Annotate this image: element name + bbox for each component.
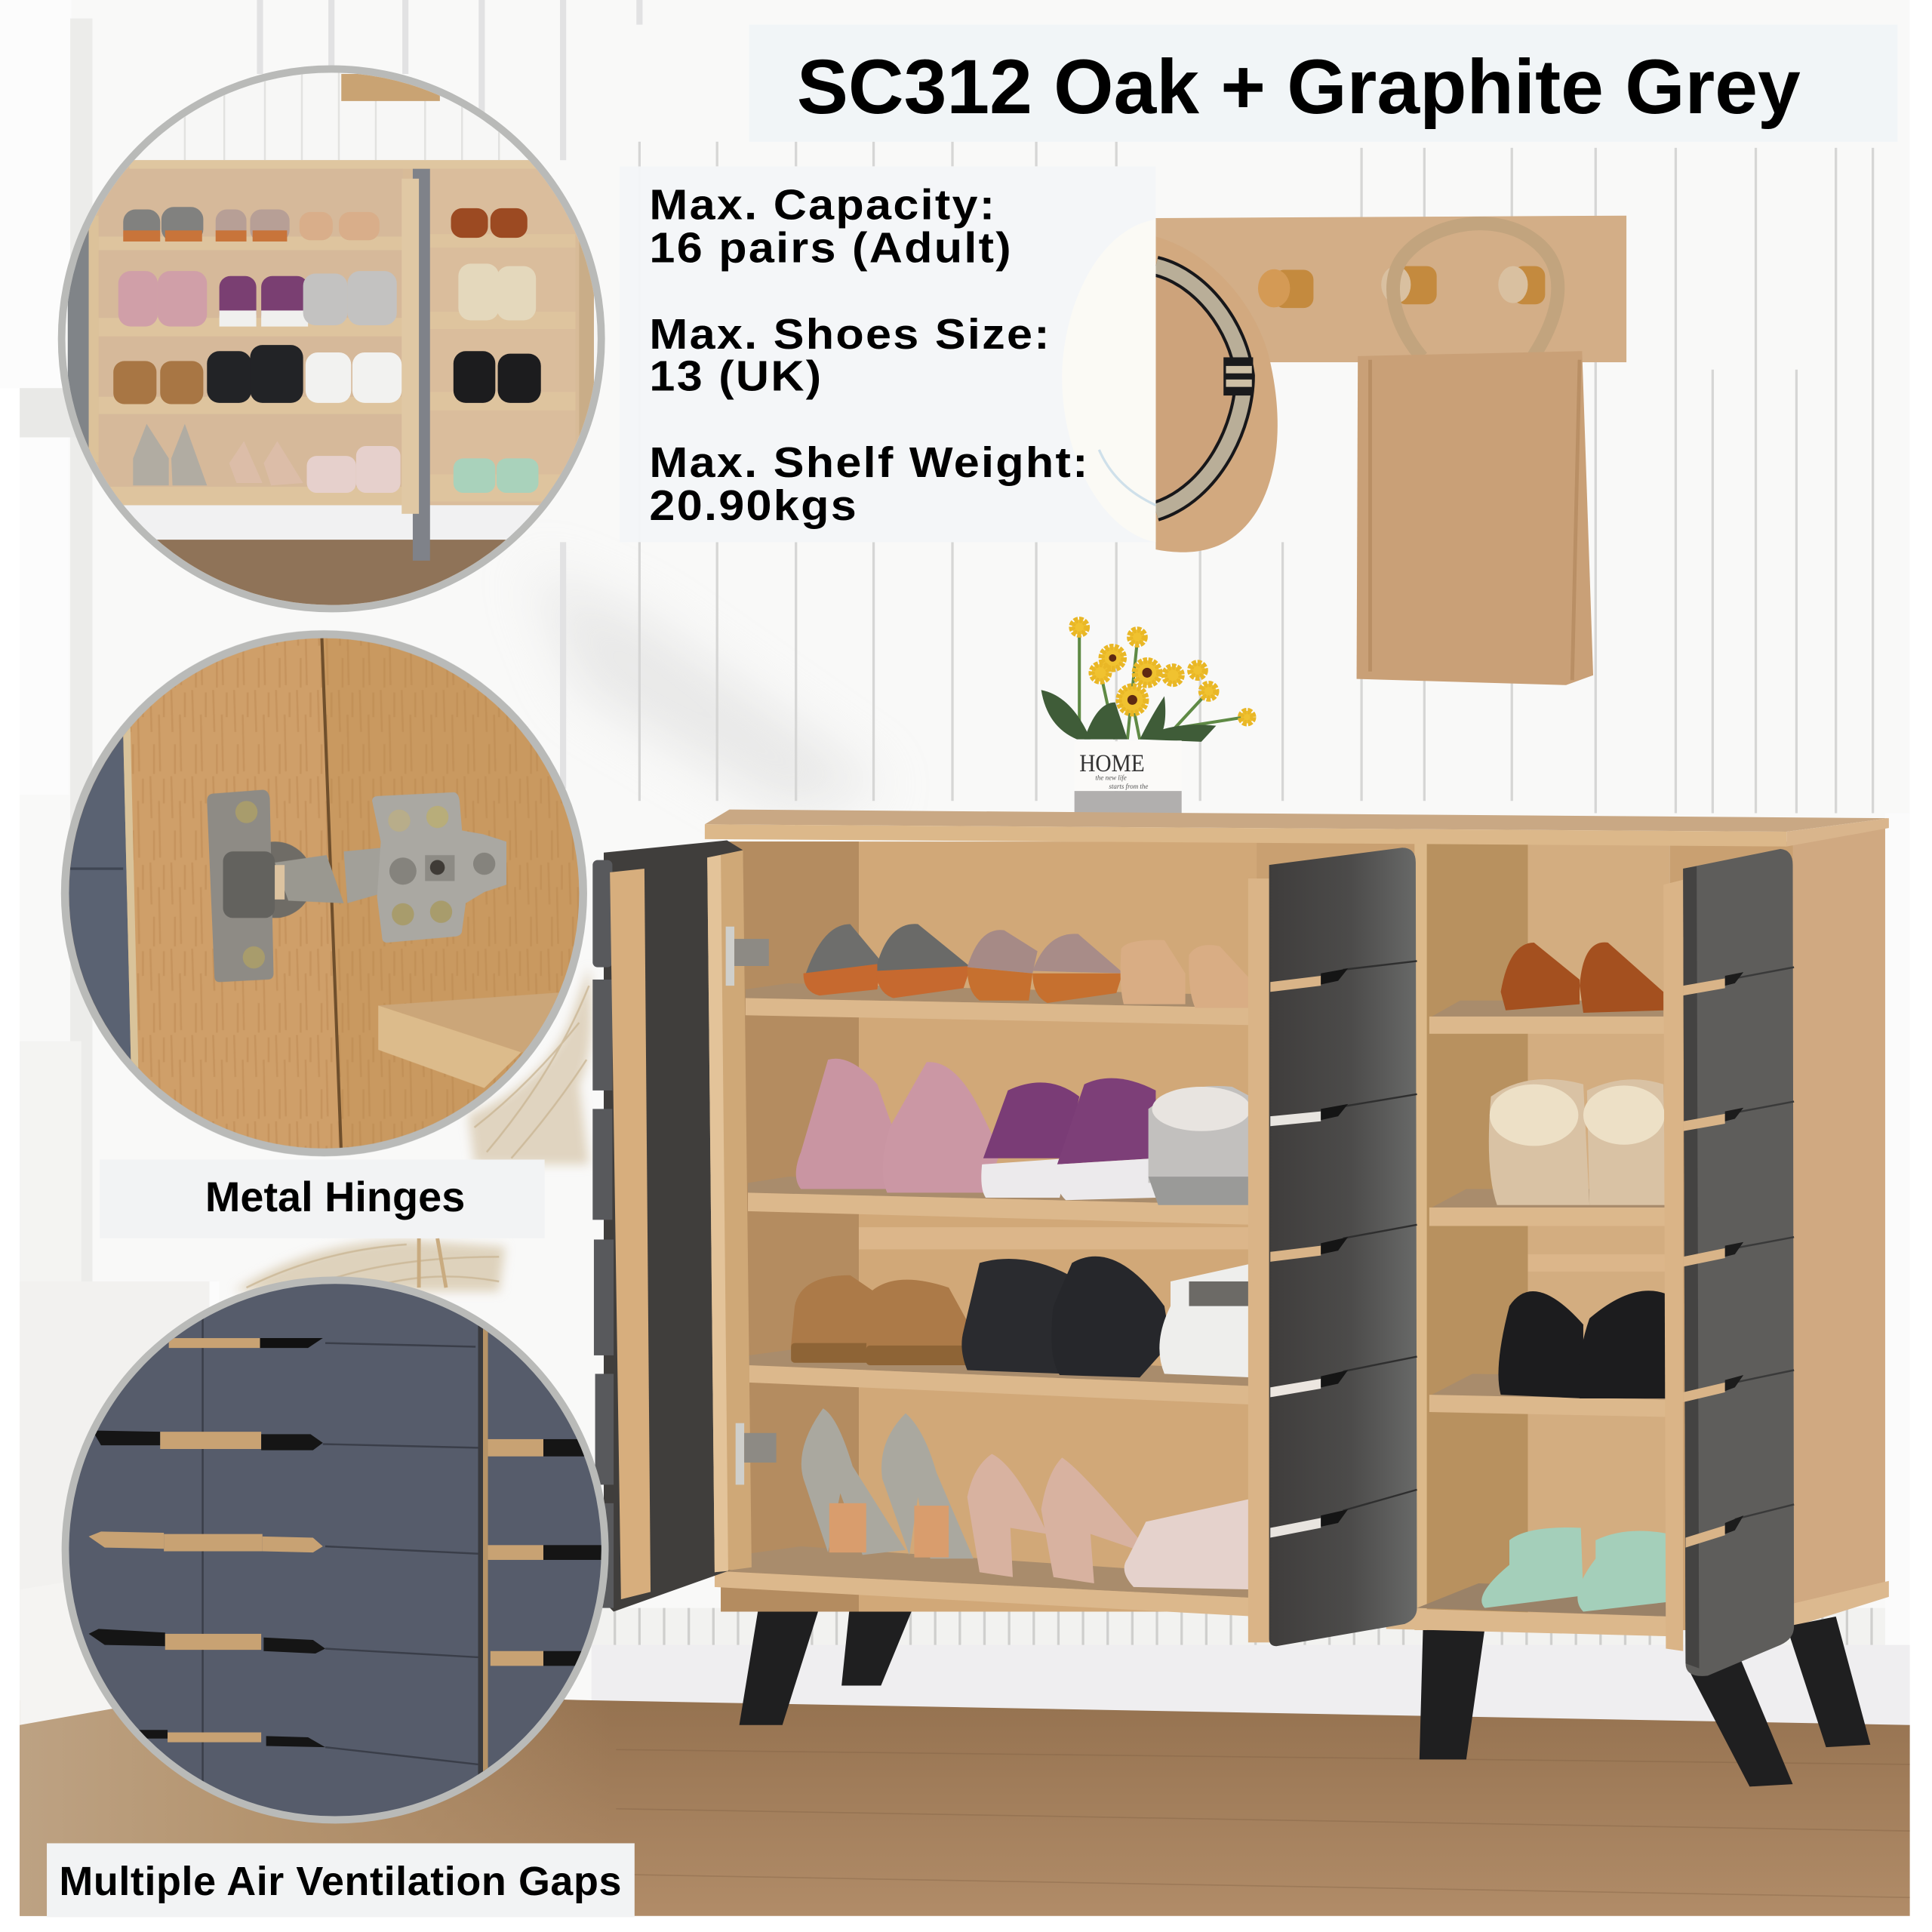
yellow flowers [1072,620,1253,723]
cabinet [592,810,1889,1786]
title banner [749,25,1897,142]
panel: spec text block [649,182,1090,529]
shoes: left bay row 3 [791,1257,1254,1377]
shelf weight spec: Max. Shelf Weight: [649,439,1090,486]
shelf [378,992,558,1088]
pot label: HOME [1079,750,1145,777]
pegs [1258,266,1545,308]
left open door [592,840,777,1612]
label: metal hinges [100,1159,545,1238]
middle door [1248,848,1417,1646]
mini shoes row 2 [118,263,536,327]
shoes: right bay [1481,943,1669,1612]
shoe size spec: 13 (UK) [649,353,823,400]
shoes: left bay row 4 [801,1408,1253,1589]
right door [1663,849,1794,1676]
shoe size spec: Max. Shoes Size: [649,311,1051,358]
label: ventilation gaps: Multiple Air Ventilation Gaps [59,1859,622,1904]
hinge plate left [207,790,275,982]
hinge top [726,927,769,986]
hinge plate right [372,792,506,943]
hinge arm [275,848,382,903]
cabinet top board [705,810,1889,847]
leaves [1041,690,1216,742]
pot label: the new life [1095,774,1127,781]
mini shoes row 4 [133,424,538,493]
pot [1075,740,1182,791]
hinge cup [236,841,313,918]
wooden plank [1155,216,1626,362]
legs [740,1589,1870,1786]
center door edge and leg [401,169,430,561]
right door ventilation notches [1683,972,1743,1548]
label: ventilation gaps [47,1843,635,1917]
left bay shelves [715,983,1257,1617]
mini shoes row 1 [123,207,528,242]
label: metal hinges: Metal Hinges [205,1173,465,1220]
jute bag [1357,223,1593,685]
mini shoes row 3 [113,345,541,405]
flower pot [1041,620,1253,818]
shoes: left bay row 2 [796,1059,1251,1205]
interior backing behind doors [1248,841,1793,1630]
circle: shoes inside cabinet [55,62,610,616]
capacity spec: Max. Capacity: [649,182,996,229]
baseboard [592,1645,1910,1727]
shoes: left bay row 1 [803,924,1251,1008]
hinge bottom [736,1423,777,1484]
door seams [203,1275,478,1823]
oak edge strip [478,1275,488,1823]
title banner: SC312 Oak + Graphite Grey [797,44,1801,130]
circle: ventilation gaps closeup [62,1275,610,1823]
ventilation slot rows [89,1338,605,1747]
pot label [1079,750,1148,790]
pampas grass [234,968,592,1291]
pot label: starts from the [1109,783,1148,790]
stems [1079,631,1244,740]
hook rack with hat and bag [1155,216,1626,685]
bottom board right edge [1774,1581,1889,1632]
right bay back [1417,841,1669,1630]
shelf weight spec: 20.90kgs [649,482,858,529]
right bay shelves [1386,1001,1669,1636]
left bay back [721,841,1257,1612]
floor [20,1564,1910,1916]
middle door ventilation notches [1270,968,1348,1538]
panel: specifications background [620,166,1155,542]
cabinet side panel [1774,828,1885,1620]
circle: metal hinge closeup [61,630,592,1156]
capacity spec: 16 pairs (Adult) [649,225,1013,272]
straw hat [1155,236,1278,552]
